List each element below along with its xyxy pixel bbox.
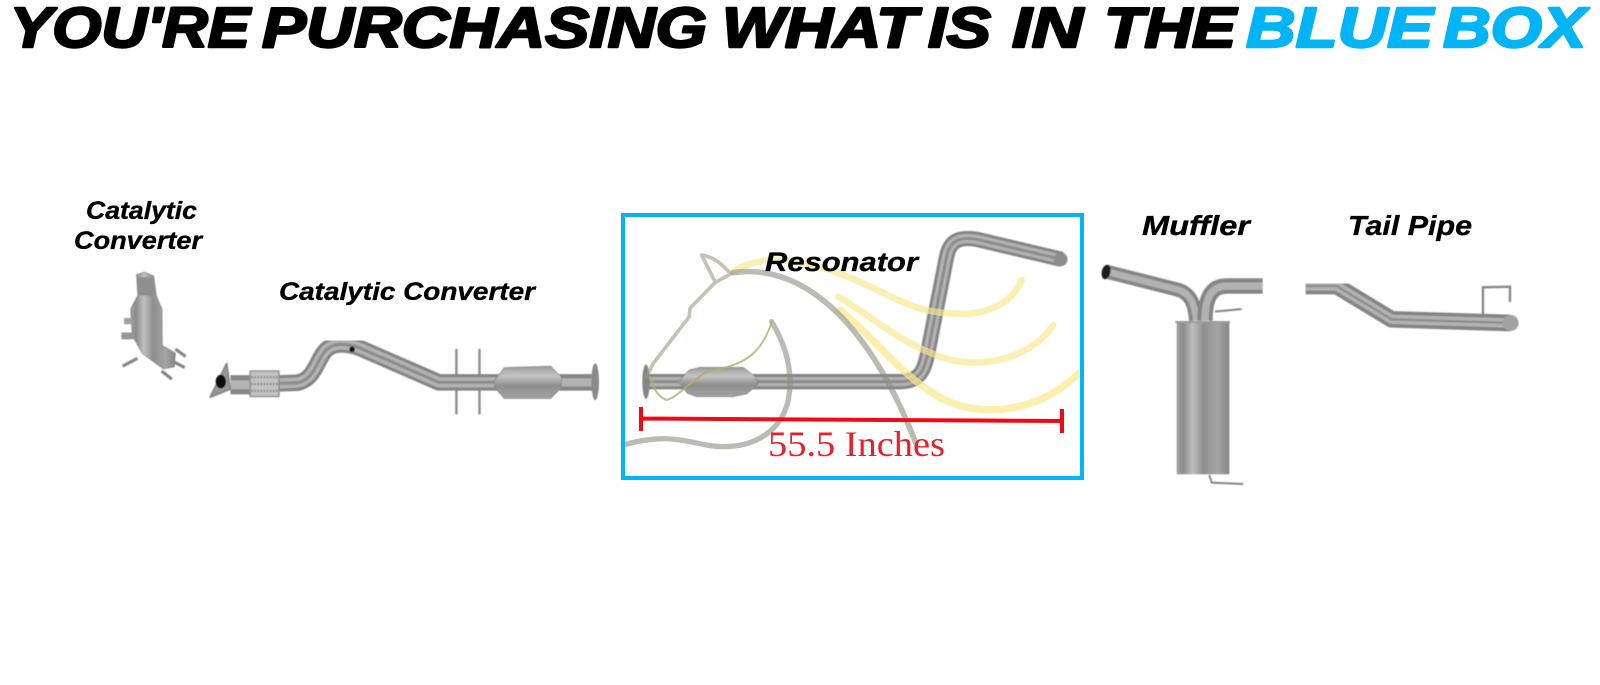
label: catalytic converter (small) [74,197,203,255]
title [10,0,1589,60]
dimension line [641,407,1063,433]
label: muffler: Muffler [1142,210,1252,241]
icon: small catalytic converter [121,272,186,379]
icon: front pipe with flex section and catalytic converter [210,344,599,414]
label: catalytic converter: Catalytic Converter [279,278,536,306]
watermark: horse head [623,255,1082,447]
panel: blue box [623,215,1082,478]
diagram: resonator pipe [642,239,1068,399]
dimension label: 55.5 Inches [768,424,945,464]
icon: tail pipe [1306,286,1519,331]
label: resonator: Resonator [765,247,920,277]
panel border [623,215,1082,478]
label: catalytic converter (small): Catalytic [86,197,197,225]
label: tail pipe: Tail Pipe [1348,210,1472,241]
icon: muffler [1100,264,1263,484]
label: catalytic converter (small): Converter [74,227,203,255]
